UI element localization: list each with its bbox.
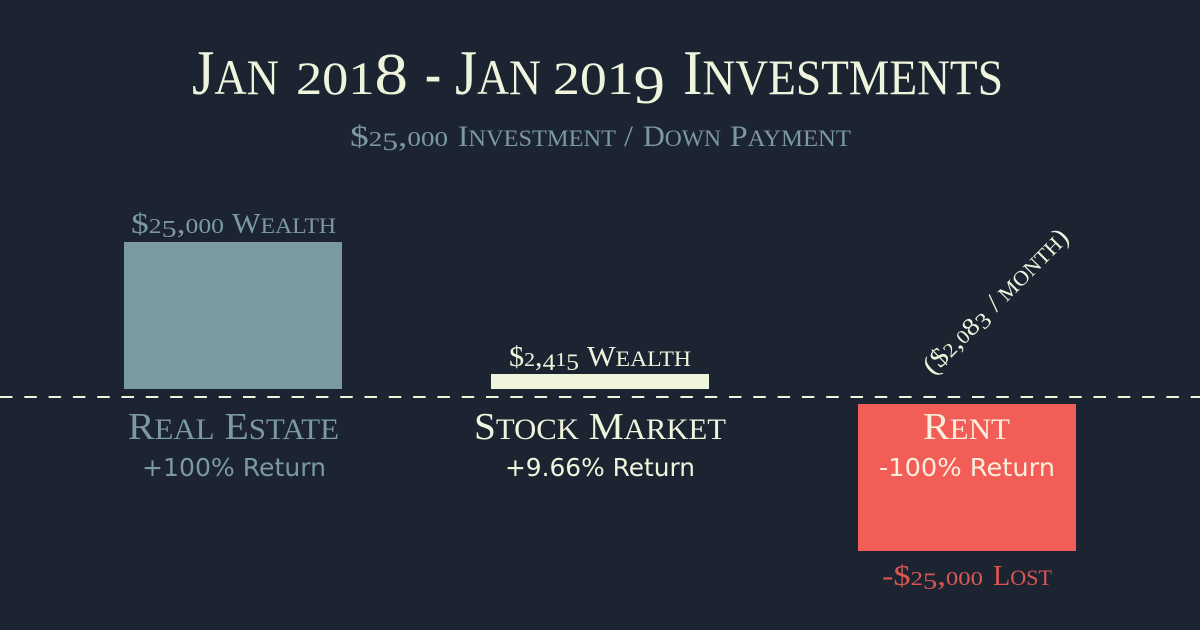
panel: real estate: [124, 208, 342, 482]
rent bar: [858, 404, 1076, 551]
real estate wealth label: $25,000: [131, 208, 224, 243]
subtitle: [350, 120, 851, 156]
title: [192, 37, 1003, 115]
real estate wealth label: [131, 208, 336, 243]
title: 2019: [553, 53, 665, 115]
rent monthly cost rotated label: ($2,083: [916, 302, 996, 382]
stock market return: +9.66% Return: [505, 453, 695, 482]
subtitle: $25,000: [350, 120, 448, 156]
subtitle: /: [624, 120, 634, 153]
rent monthly cost rotated label: MONTH): [990, 222, 1074, 307]
subtitle: PAYMENT: [730, 120, 851, 153]
title: 2018: [296, 42, 408, 107]
baseline dashed divider: [0, 396, 1200, 398]
subtitle: DOWN: [643, 120, 721, 153]
subtitle: INVESTMENT: [458, 120, 616, 153]
rent lost label: [882, 561, 1052, 595]
title: JAN: [455, 37, 541, 108]
rent monthly cost rotated label: /: [980, 289, 1007, 317]
stock market bar: [491, 374, 709, 389]
real estate return: +100% Return: [142, 453, 326, 482]
title: INVESTMENTS: [683, 37, 1003, 108]
rent return: -100% Return: [879, 453, 1055, 482]
rent lost label: -$ 25,000: [882, 561, 983, 595]
real estate wealth label: WEALTH: [232, 208, 336, 240]
title: JAN: [192, 37, 279, 108]
stock market wealth label: [509, 342, 691, 376]
stock market wealth label: WEALTH: [587, 342, 691, 373]
real estate bar: [124, 242, 342, 389]
panel: rent: [858, 222, 1076, 595]
rent heading: RENT: [923, 406, 1010, 448]
rent lost label: LOST: [993, 561, 1052, 592]
panel: stock market: [474, 342, 726, 482]
stock market wealth label: $2,415: [509, 342, 579, 376]
stock market heading: STOCK MARKET: [474, 406, 726, 448]
real estate heading: REAL ESTATE: [128, 406, 339, 448]
rent monthly cost rotated label: [916, 222, 1076, 382]
title: -: [425, 37, 441, 108]
